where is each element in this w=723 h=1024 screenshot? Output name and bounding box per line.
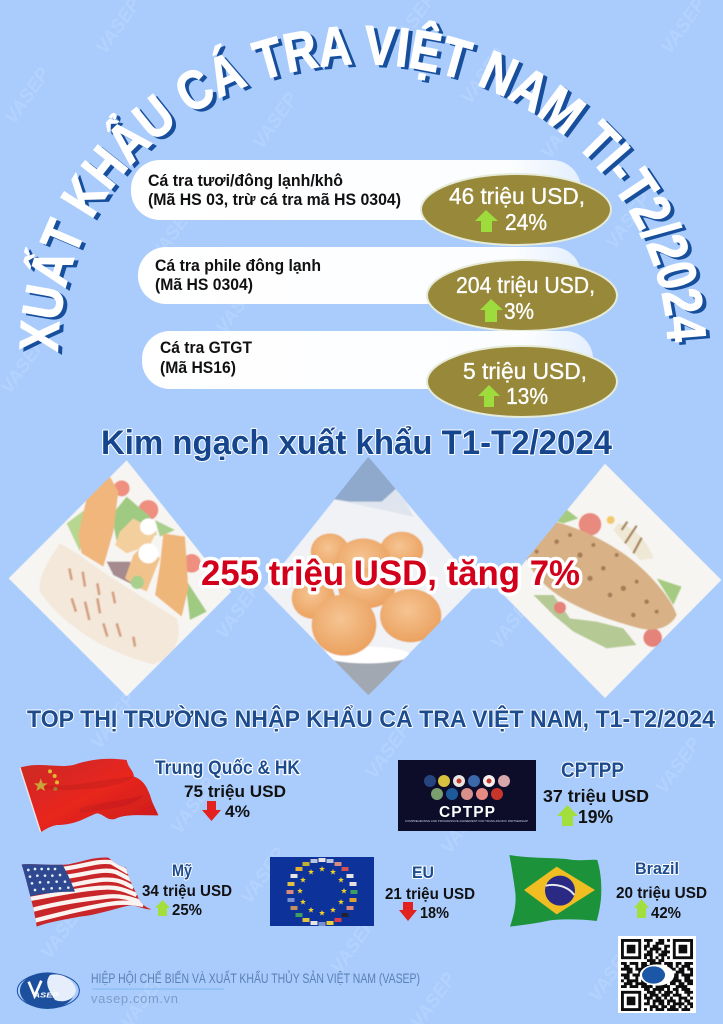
image: fish wrap diamond [8, 460, 232, 697]
market value: 37 triệu USD [543, 786, 649, 806]
pill 2 label: Cá tra phile đông lạnh [155, 256, 321, 275]
oval value 1 [421, 174, 611, 245]
logo: VASEP [17, 972, 79, 1009]
pill 3 label [160, 338, 253, 377]
pill 2 [138, 247, 581, 304]
icon: China flag [20, 759, 158, 832]
image: grilled fish diamond [500, 463, 722, 698]
icon: up arrow [634, 899, 649, 918]
logo: VASEP: ASEP [32, 990, 60, 999]
text: VASEP [147, 201, 200, 265]
icon: up arrow [557, 805, 578, 826]
market: Brazil [509, 855, 707, 927]
market: CPTPP [398, 759, 649, 831]
text: VASEP [327, 914, 380, 978]
text: VASEP [167, 774, 220, 838]
pill 3 [142, 331, 593, 389]
icon: CPTPP logo: CPTPP [439, 804, 495, 821]
pill 1 label: (Mã HS 03, trừ cá tra mã HS 0304) [148, 190, 401, 209]
icon: down arrow [399, 902, 417, 921]
market value: 20 triệu USD [616, 885, 707, 902]
market: EU [270, 857, 475, 926]
panel: product row 1 [131, 160, 611, 245]
market change: 25% [172, 902, 202, 919]
oval value 2 [427, 260, 617, 331]
text: VASEP [585, 942, 638, 1006]
oval value 3: 13% [506, 383, 548, 409]
market: USA [20, 855, 232, 928]
oval value 1: 24% [505, 209, 547, 235]
icon: EU flag [270, 857, 374, 926]
text: VASEP [249, 89, 302, 153]
market value: 21 triệu USD [385, 886, 475, 903]
text: VASEP [457, 44, 510, 108]
title: XUẤT KHẨU CÁ TRA VIỆT NAM TI-T2/2024 [23, 23, 710, 355]
market change: 18% [420, 905, 449, 922]
oval value 2: 3% [504, 298, 534, 324]
text: VASEP [487, 589, 540, 653]
pill 1 [131, 160, 581, 220]
market change: 19% [578, 807, 613, 827]
image: fish balls diamond [263, 457, 477, 696]
pill 2 label [155, 256, 321, 294]
oval value 1: 46 triệu USD, [449, 183, 585, 209]
text: VASEP [537, 99, 590, 163]
title: XUẤT KHẨU CÁ TRA VIỆT NAM TI-T2/2024 [19, 20, 706, 352]
market change: 42% [651, 905, 681, 922]
market name: Brazil [635, 859, 679, 878]
text: VASEP [652, 734, 705, 798]
panel: product row 3 [142, 331, 617, 417]
oval value 3: 5 triệu USD, [463, 358, 587, 384]
icon: Brazil flag [509, 855, 601, 927]
pill 2 label: (Mã HS 0304) [155, 275, 253, 294]
oval value 2: 204 triệu USD, [456, 272, 595, 298]
panel: product row 2 [138, 247, 617, 331]
pill 3 label: Cá tra GTGT [160, 338, 253, 357]
text: VASEP [362, 719, 415, 783]
text: VASEP [1, 64, 54, 128]
footer: organisation name: HIỆP HỘI CHẾ BIẾN VÀ XUẤT KHẨU THỦY SẢN VIỆT NAM (VASEP) [91, 971, 420, 986]
icon: USA flag [20, 855, 153, 928]
footer: organisation name: vasep.com.vn [91, 991, 178, 1006]
QR code [618, 936, 696, 1013]
market value: 34 triệu USD [142, 883, 232, 900]
icon: CPTPP logo: COMPREHENSIVE AND PROGRESSIVE AGREEMENT FOR TRANS-PACIFIC PARTNERSHIP [405, 819, 528, 823]
text: VASEP [212, 274, 265, 338]
text: VASEP [37, 899, 90, 963]
heading: export value: Kim ngạch xuất khẩu T1-T2/2024 [101, 424, 612, 462]
callout: total value: 255 triệu USD, tăng 7% [201, 554, 580, 593]
market name: EU [412, 863, 434, 882]
text: VASEP [237, 844, 290, 908]
icon: up arrow [155, 900, 170, 916]
icon: down arrow [202, 801, 221, 821]
pill 3 label: (Mã HS16) [160, 358, 236, 377]
text: VASEP [602, 189, 655, 253]
market name: Trung Quốc & HK [155, 758, 300, 779]
market name: CPTPP [561, 759, 624, 782]
market name: Mỹ [172, 861, 192, 880]
text: VASEP [437, 794, 490, 858]
pill 1 label [148, 171, 401, 209]
market change: 4% [225, 802, 250, 821]
market: China and HK [20, 758, 300, 832]
text: VASEP [212, 579, 265, 643]
footer: organisation name [91, 971, 420, 1006]
market value: 75 triệu USD [184, 782, 286, 801]
icon: CPTPP logo [398, 760, 536, 831]
pill 1 label: Cá tra tươi/đông lạnh/khô [148, 171, 343, 190]
text: VASEP [87, 689, 140, 753]
oval value 3 [427, 346, 617, 417]
